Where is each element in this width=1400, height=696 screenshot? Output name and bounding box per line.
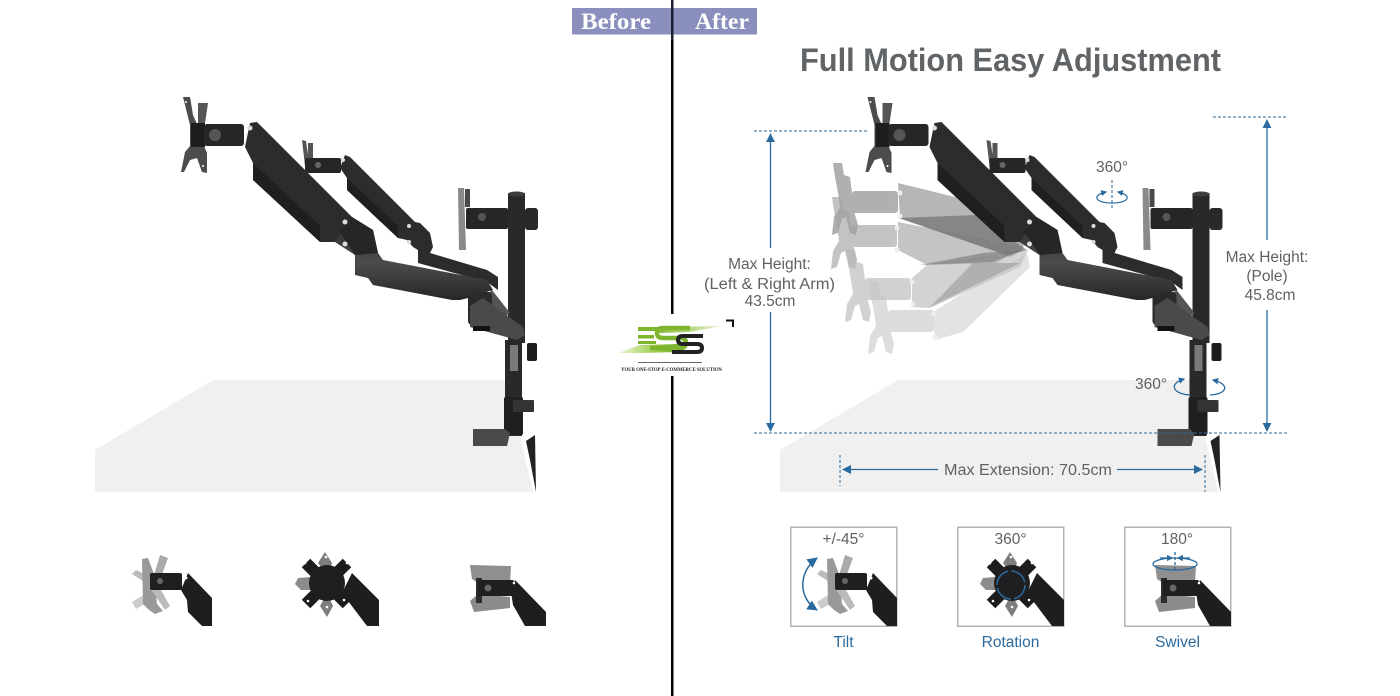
left panel: before: [95, 97, 546, 626]
text: arm max height: [704, 256, 835, 310]
callout: pole 360 degree rotation: 360°: [1135, 376, 1167, 393]
rotation angle: 360°: [994, 531, 1027, 548]
rotation panel: [958, 527, 1064, 651]
dimension guide lines: [754, 117, 1288, 492]
tilt thumbnail: [132, 555, 212, 626]
swivel label: Swivel: [1155, 634, 1200, 651]
text: arm max height: (Left & Right Arm): [704, 276, 835, 293]
dual monitor arm: [181, 97, 538, 492]
text: arm max height: 43.5cm: [745, 293, 795, 310]
rotation thumbnail: [295, 552, 379, 626]
ghost arm positions: [831, 163, 1030, 354]
logo tagline: YOUR ONE-STOP E-COMMERCE SOLUTION: [621, 367, 722, 373]
right dual monitor arm: [866, 97, 1222, 492]
tilt panel: [791, 527, 897, 651]
rotation arrows: [997, 571, 1025, 599]
tilt angle: +/-45°: [823, 531, 864, 548]
text: pole max height: [1226, 249, 1308, 304]
center divider line: [671, 0, 674, 696]
rotation label: Rotation: [982, 634, 1039, 651]
swivel thumbnail: [470, 565, 546, 626]
logo: [614, 314, 736, 376]
tilt arrow: [803, 558, 817, 610]
swivel arrows: [1153, 552, 1197, 570]
arrow: max extension: [843, 468, 1202, 470]
tilt label: Tilt: [833, 634, 854, 651]
before after banner: [572, 0, 757, 40]
right desk surface: [780, 380, 1218, 492]
text: arm max height: Max Height:: [728, 256, 811, 273]
text: pole max height: 45.8cm: [1245, 287, 1295, 304]
text: pole max height: (Pole): [1246, 268, 1288, 285]
arrow: left and right arm height: [770, 134, 772, 431]
swivel panel: [1125, 527, 1231, 651]
swivel angle: 180°: [1161, 531, 1193, 548]
before after banner: After: [695, 9, 749, 34]
arrow: pole height: [1266, 120, 1268, 431]
callout: arm 360 degree rotation: [1096, 159, 1128, 210]
title: Full Motion Easy Adjustment: [800, 42, 1221, 78]
desk surface: [95, 380, 533, 492]
before label: Before: [581, 9, 651, 34]
callout: arm 360 degree rotation: 360°: [1096, 159, 1128, 176]
text: max extension: Max Extension: 70.5cm: [944, 462, 1112, 479]
text: pole max height: Max Height:: [1226, 249, 1308, 266]
callout: pole 360 degree rotation: [1135, 376, 1225, 395]
